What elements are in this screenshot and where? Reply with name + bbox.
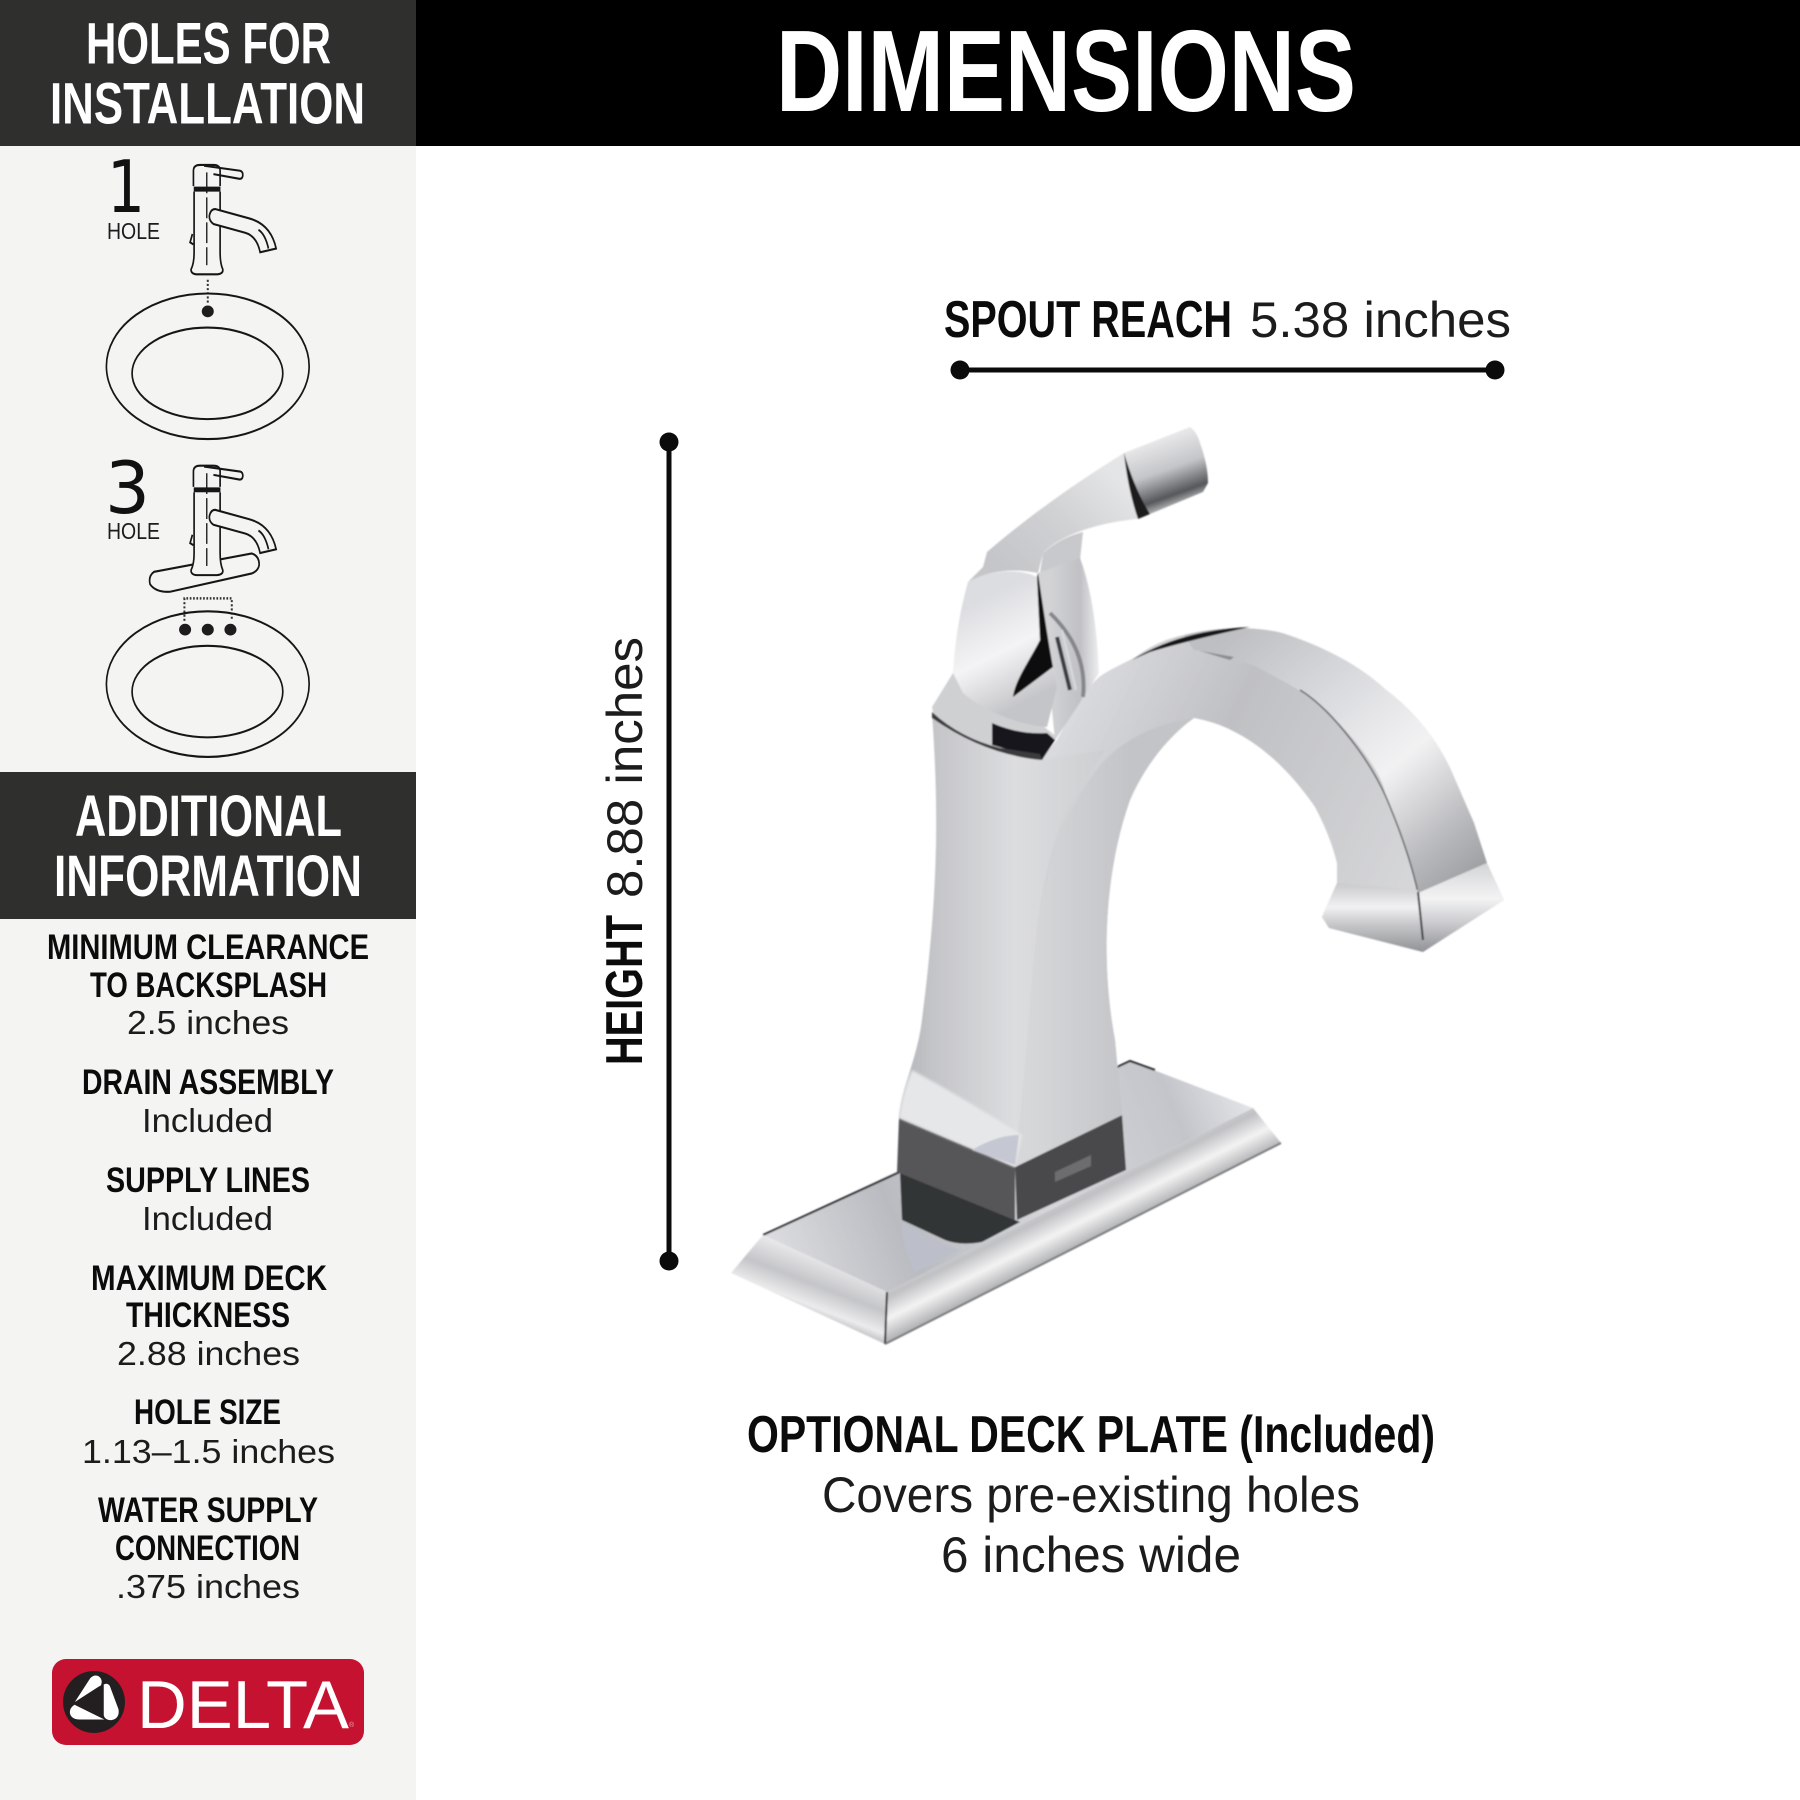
callout: optional deck plate: Covers pre-existing holes [822, 1467, 1360, 1523]
header: holes for installation [0, 0, 416, 146]
spec: minimum clearance: 2.5 inches [127, 1004, 289, 1041]
spec: supply lines [106, 1161, 310, 1237]
measurement: spout reach [944, 291, 1511, 380]
spec: water supply connection [98, 1491, 318, 1605]
label: 1 hole: 1 [107, 145, 145, 229]
spec: drain assembly: Included [142, 1102, 273, 1139]
spec: supply lines: SUPPLY LINES [106, 1161, 310, 1200]
icon: single-hole faucet and sink [106, 165, 309, 439]
measurement: height: 8.88 inches [597, 637, 653, 898]
measurement: spout reach: SPOUT REACH [944, 291, 1232, 349]
callout: optional deck plate: 6 inches wide [941, 1527, 1241, 1583]
logo: delta: DELTA [137, 1667, 350, 1743]
title banner: dimensions [416, 0, 1800, 146]
measurement: height [596, 432, 678, 1270]
spec: hole size: HOLE SIZE [134, 1393, 281, 1432]
spec: maximum deck thickness: 2.88 inches [117, 1335, 300, 1372]
spec: supply lines: Included [142, 1200, 273, 1237]
logo: delta: ® [349, 1721, 355, 1729]
sidebar panel background [0, 0, 416, 1800]
measurement: height: HEIGHT [596, 915, 654, 1065]
callout: optional deck plate: OPTIONAL DECK PLATE (Included) [747, 1406, 1435, 1464]
spec: drain assembly [82, 1063, 334, 1139]
measurement: spout reach: 5.38 inches [1250, 292, 1511, 348]
spec: hole size: 1.13–1.5 inches [82, 1433, 335, 1470]
callout: optional deck plate [747, 1406, 1435, 1583]
spec: water supply connection: WATER SUPPLY [98, 1491, 318, 1530]
label: 3 hole: HOLE [107, 518, 160, 544]
logo: delta [52, 1659, 364, 1745]
spec: minimum clearance [47, 928, 369, 1041]
spec: drain assembly: DRAIN ASSEMBLY [82, 1063, 334, 1102]
spec: minimum clearance: MINIMUM CLEARANCE [47, 928, 369, 967]
title banner: dimensions: DIMENSIONS [776, 6, 1356, 136]
label: 1 hole: HOLE [107, 218, 160, 244]
label: 3 hole: 3 [105, 446, 150, 530]
faucet body and spout [899, 627, 1504, 1167]
header: additional information [0, 772, 416, 919]
header: additional information: ADDITIONAL [75, 784, 342, 849]
handle [932, 427, 1208, 760]
spec: maximum deck thickness [91, 1259, 327, 1372]
header: additional information: INFORMATION [54, 844, 362, 909]
deck plate [731, 1061, 1281, 1344]
spec: minimum clearance: TO BACKSPLASH [90, 966, 327, 1005]
spec: water supply connection: CONNECTION [115, 1529, 300, 1568]
faucet photo illustration [731, 427, 1504, 1344]
plate reflection of sensor base [900, 1173, 1020, 1244]
spec: maximum deck thickness: MAXIMUM DECK [91, 1259, 327, 1298]
sensor base [897, 1115, 1126, 1220]
spec: maximum deck thickness: THICKNESS [126, 1296, 290, 1335]
icon: three-hole faucet with deck plate and sink [106, 466, 309, 757]
header: holes for installation: HOLES FOR [86, 12, 331, 76]
header: holes for installation: INSTALLATION [50, 72, 365, 136]
spec: hole size [82, 1393, 335, 1470]
spec: water supply connection: .375 inches [116, 1568, 300, 1605]
